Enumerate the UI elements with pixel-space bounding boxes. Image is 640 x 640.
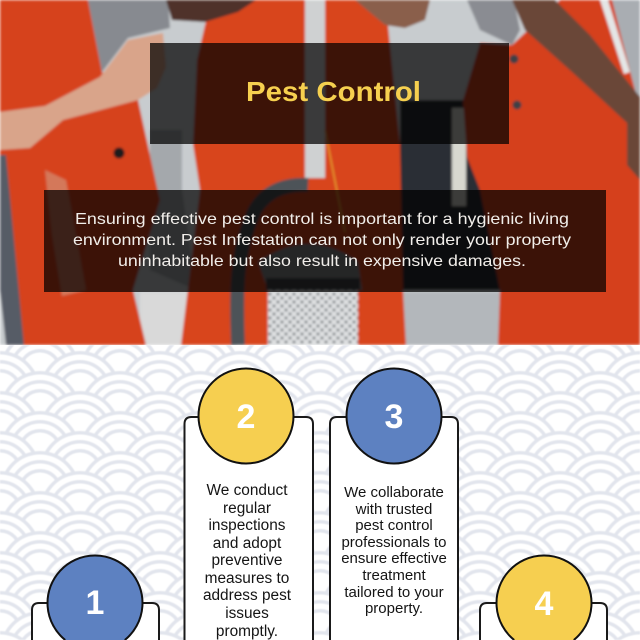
panel: intro text band [44,190,606,292]
raised arm [166,0,256,22]
button lower [512,100,522,110]
number badge 2: 2 [237,398,255,436]
vacuum dotted base [268,290,358,345]
title: Pest Control [246,76,421,107]
vacuum band [266,278,360,290]
intro text: environment. Pest Infestation can not only render your property [73,232,571,249]
card 2 text: preventive [211,552,283,569]
intro text [73,211,571,270]
right background [612,0,640,110]
panel: title band [150,43,509,144]
card 3 text: treatment [362,567,427,584]
card 3 text: We collaborate [344,484,444,501]
bright door strip [452,108,466,206]
left worker shirt [88,0,170,72]
number badge 4: 4 [535,585,554,623]
patterned background [0,345,640,640]
center worker hand [355,0,430,28]
card 2 text: issues [225,605,269,622]
dark room area [400,100,500,290]
buttons [510,54,518,64]
card 2 text: regular [223,500,271,517]
photo: workers in orange overalls [0,0,640,345]
left worker arm [0,33,166,150]
right worker arm [512,0,640,180]
vacuum body [258,244,362,290]
intro text: Ensuring effective pest control is important for a hygienic living [75,211,569,228]
chair [148,130,191,284]
cord [325,130,345,232]
vacuum hose [237,185,308,345]
floor right [400,292,500,345]
card 2 text [203,482,292,640]
right worker overalls [463,0,640,345]
card 3 [330,368,458,640]
card 2 text: promptly. [216,623,278,640]
number badge 2 [198,368,294,464]
floor [140,292,190,345]
pole right [600,0,630,74]
card 2 text: and adopt [213,535,282,552]
number badge 1: 1 [86,584,104,622]
card 3 text: professionals to [341,534,447,551]
right worker shirt [467,0,520,45]
card 3 text: pest control [355,517,433,534]
card 3 text [341,484,447,617]
card 2 text: inspections [208,517,286,534]
card 3 text: ensure effective [341,550,447,567]
left worker overalls [0,0,160,345]
card 4 [480,556,607,640]
card 2 [184,368,313,640]
number badge 3 [346,368,442,464]
card 3 text: property. [365,600,423,617]
intro text: uninhabitable but also result in expensive damages. [118,253,526,270]
card 1 [32,556,159,640]
card 2 text: address pest [203,587,292,604]
card 3 text: with trusted [355,501,432,518]
button [114,148,124,158]
card 3 text: tailored to your [344,584,444,601]
room background [0,0,562,345]
number badge 3: 3 [385,398,403,436]
card 2 text: measures to [205,570,289,587]
card 2 text: We conduct [206,482,288,499]
vacuum pole center [305,0,325,178]
center worker overalls [181,0,406,345]
fabric highlight [45,170,86,296]
vacuum pole left [0,155,24,345]
